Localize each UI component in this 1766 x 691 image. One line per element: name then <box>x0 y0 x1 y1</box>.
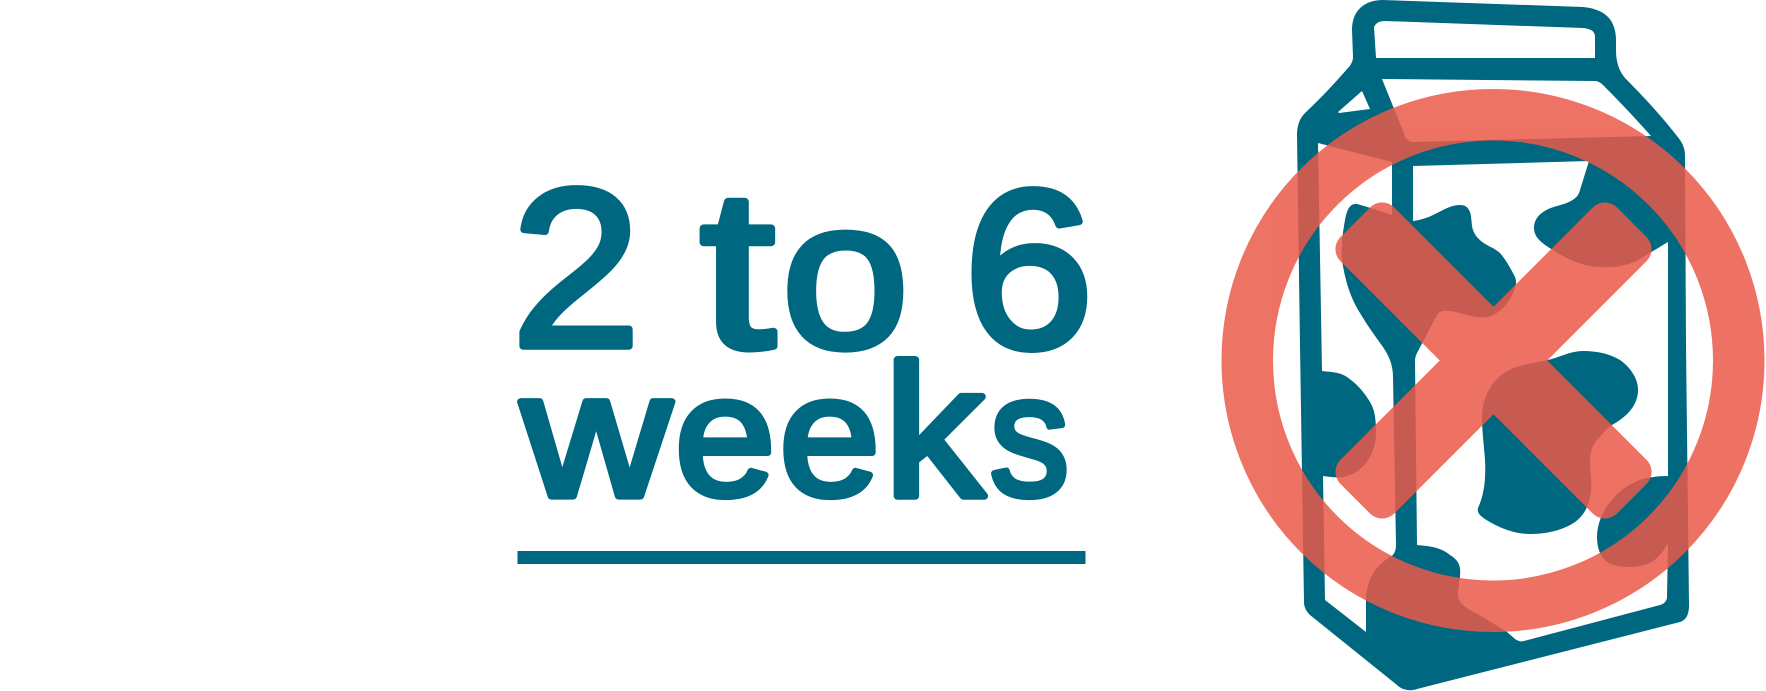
heading: 2 to 6 <box>512 143 1094 395</box>
icon: milk carton <box>1297 0 1689 690</box>
carton top window <box>1374 21 1595 58</box>
cross <box>1217 84 1766 637</box>
heading: 2 to 6: o <box>782 155 909 392</box>
heading: weeks <box>520 327 1069 537</box>
heading: weeks: e <box>675 339 776 532</box>
heading: weeks: k <box>884 327 985 537</box>
icon: prohibition symbol <box>1217 84 1766 637</box>
heading: 2 to 6: t <box>700 143 775 395</box>
heading: 2 to 6: 2 <box>512 143 640 394</box>
carton top panel <box>1382 79 1651 142</box>
heading: 2 to 6: 6 <box>964 143 1094 395</box>
heading: weeks: s <box>990 340 1069 532</box>
divider line under heading <box>518 551 1086 564</box>
prohibition ring <box>1247 115 1739 606</box>
carton silhouette <box>1297 0 1689 690</box>
carton centre spot <box>1478 351 1638 534</box>
carton right panel <box>1413 161 1668 641</box>
heading: weeks: e <box>779 339 880 532</box>
carton left triangle <box>1338 91 1370 113</box>
carton left panel <box>1318 143 1396 632</box>
heading: weeks: w <box>520 334 671 534</box>
